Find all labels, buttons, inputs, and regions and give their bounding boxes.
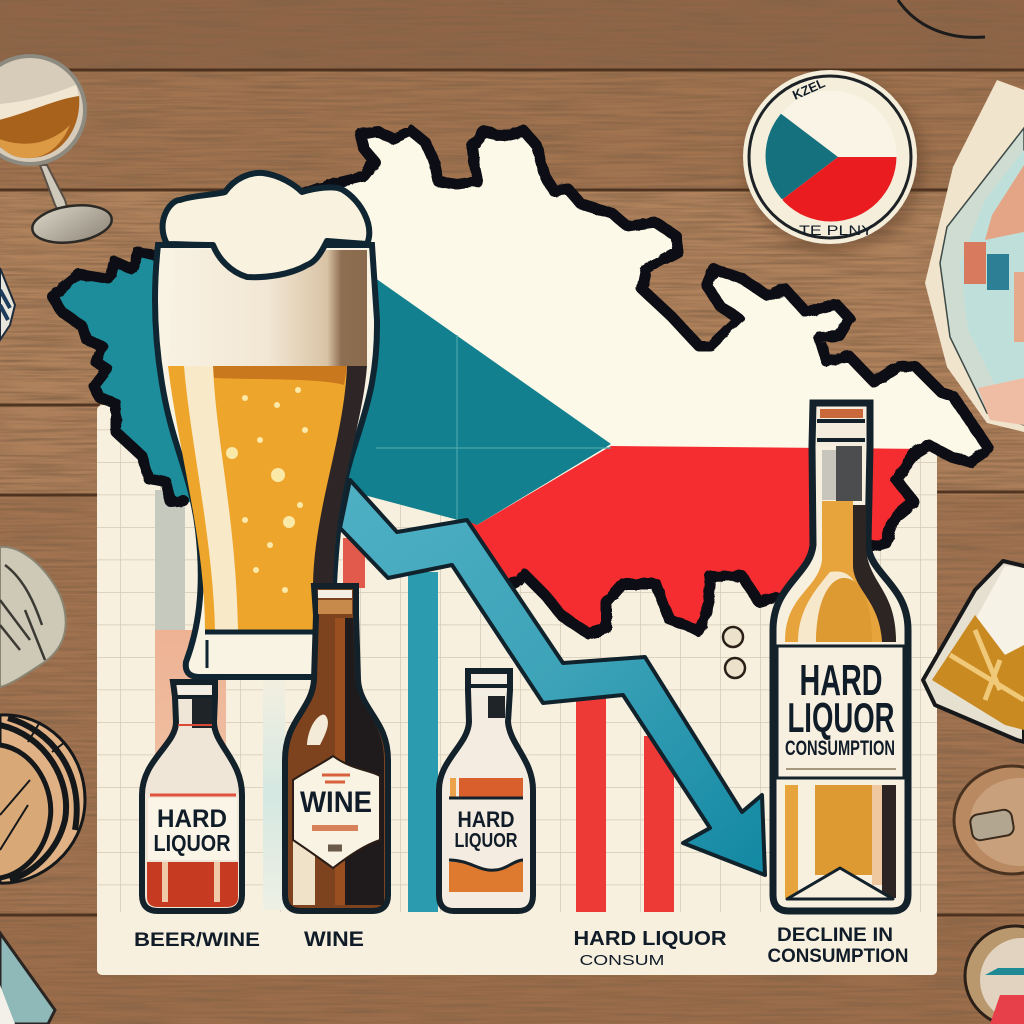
flag: blue triangle — [340, 258, 611, 525]
map outline — [51, 130, 988, 633]
wine glass — [0, 56, 114, 247]
small can — [965, 926, 1024, 1024]
label: decline in: DECLINE IN — [777, 925, 893, 946]
label: wine: WINE — [304, 928, 364, 951]
head of foam in glass — [168, 250, 367, 366]
bottle: hard liquor consumption: CONSUMPTION — [785, 737, 895, 760]
flag: blue left part — [53, 240, 200, 503]
barrel — [0, 715, 85, 883]
chart bars — [155, 490, 674, 912]
photo card — [0, 933, 55, 1024]
map of Czechia with flag colours — [51, 130, 990, 635]
bottle: hard liquor centre: LIQUOR — [454, 830, 518, 852]
bottle: hard liquor centre — [439, 671, 533, 911]
wire — [898, 0, 985, 37]
crumpled foil — [0, 547, 66, 687]
decorative dots — [723, 627, 745, 678]
chart labels — [134, 925, 908, 969]
bottle: hard liquor consumption — [773, 403, 908, 911]
bottle: hard liquor consumption: LIQUOR — [788, 694, 894, 741]
label text: hard liquor consumption: HARD — [800, 656, 882, 705]
flag badge — [743, 70, 925, 253]
bottle: hard liquor left: LIQUOR — [154, 830, 231, 856]
map scroll — [925, 80, 1024, 432]
declining trend arrow — [340, 480, 765, 875]
flag badge: TE PLNY — [799, 222, 874, 238]
flag badge: KZEL — [790, 75, 827, 103]
label: beer/wine: BEER/WINE — [134, 930, 260, 951]
lower amber liquid — [785, 785, 798, 898]
can lid — [954, 766, 1024, 874]
beer liquid — [168, 366, 347, 630]
label text: hard liquor: HARD — [458, 807, 514, 832]
upper amber liquid — [785, 501, 896, 642]
flag: red part — [470, 446, 930, 635]
beer glass — [155, 173, 377, 677]
label text: hard liquor: HARD — [157, 805, 227, 833]
beer mug — [923, 561, 1024, 742]
chart paper — [97, 405, 937, 975]
label: consum: CONSUM — [580, 952, 664, 969]
right edge objects — [898, 0, 1024, 1024]
left edge objects — [0, 268, 85, 1024]
bottle label — [777, 646, 904, 778]
bottle: wine — [285, 586, 388, 911]
label text: wine: WINE — [300, 786, 372, 819]
label: consumption: CONSUMPTION — [768, 946, 908, 967]
bottle: hard liquor left — [142, 682, 242, 911]
small striped object — [0, 268, 15, 340]
label: hard liquor: HARD LIQUOR — [574, 928, 727, 950]
beer foam top — [163, 173, 369, 277]
